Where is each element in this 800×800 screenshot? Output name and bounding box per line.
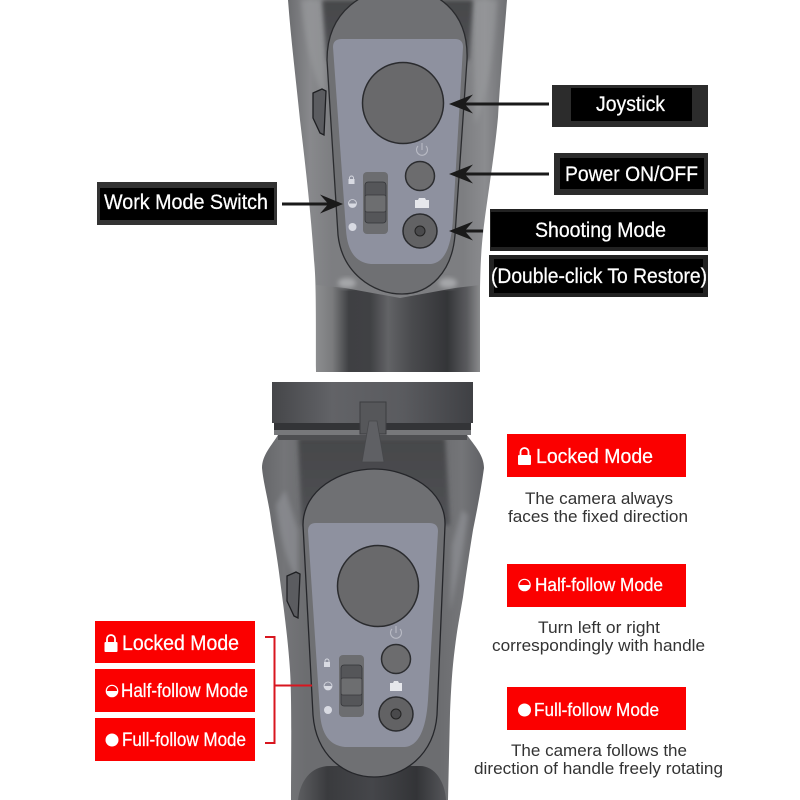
arrow: power	[449, 164, 549, 184]
camera icon, top	[415, 198, 429, 208]
description: full-follow mode: direction of handle freely rotating	[474, 760, 723, 778]
mode switch, top	[363, 172, 388, 234]
arrow: shooting mode	[449, 222, 483, 240]
right label: full-follow mode	[507, 687, 686, 730]
gimbal handle photo, top	[288, 0, 507, 372]
joystick, bottom	[338, 546, 418, 626]
tilt lever	[360, 402, 386, 462]
red bracket connector	[265, 637, 312, 743]
mode switch, bottom	[339, 655, 364, 717]
mode indicator icons, bottom	[324, 659, 332, 714]
shooting button, bottom	[379, 697, 413, 731]
panel: work modes	[95, 382, 723, 800]
description: locked mode	[508, 490, 688, 526]
description: half-follow mode: correspondingly with handle	[492, 637, 705, 655]
left label: full-follow mode: Full-follow Mode	[122, 730, 246, 751]
left label: locked mode	[95, 621, 255, 663]
description: locked mode: The camera always	[525, 490, 673, 508]
right label: full-follow mode: Full-follow Mode	[534, 700, 659, 720]
side button, bottom	[287, 572, 300, 618]
right label: half-follow mode	[507, 564, 686, 607]
label: power on/off: Power ON/OFF	[565, 163, 698, 186]
gimbal photo, bottom	[262, 382, 484, 800]
power button, top	[406, 162, 434, 190]
right label: locked mode: Locked Mode	[536, 446, 653, 468]
left label: half-follow mode	[95, 669, 255, 712]
description: half-follow mode: Turn left or right	[538, 619, 660, 637]
right label: half-follow mode: Half-follow Mode	[535, 575, 663, 595]
left label: full-follow mode	[95, 718, 255, 761]
label: joystick	[552, 85, 708, 127]
joystick, top	[362, 62, 444, 144]
arrow: work mode switch	[282, 194, 343, 214]
arrow: joystick	[449, 94, 549, 114]
description: full-follow mode: The camera follows the	[511, 742, 687, 760]
label: double-click to restore: (Double-click To Restore)	[491, 265, 707, 288]
label: power on/off	[554, 153, 708, 195]
power icon, top	[416, 143, 427, 155]
left label: half-follow mode: Half-follow Mode	[121, 681, 248, 702]
label: shooting mode: Shooting Mode	[535, 219, 666, 242]
description: half-follow mode	[492, 619, 705, 655]
label: work mode switch	[97, 182, 277, 225]
mode indicator icons, top	[348, 176, 356, 231]
label: joystick: Joystick	[596, 93, 665, 116]
left label: locked mode: Locked Mode	[122, 632, 239, 655]
description: full-follow mode	[474, 742, 723, 778]
panel: gimbal controls overview	[97, 0, 708, 372]
side button, top	[313, 89, 326, 135]
label: shooting mode	[490, 209, 708, 251]
description: locked mode: faces the fixed direction	[508, 508, 688, 526]
right label: locked mode	[507, 434, 686, 477]
label: work mode switch: Work Mode Switch	[104, 191, 268, 214]
power icon, bottom	[390, 626, 402, 638]
shooting button, top	[403, 214, 437, 248]
label: double-click to restore	[489, 255, 708, 297]
power button, bottom	[382, 644, 410, 674]
camera icon, bottom	[390, 681, 402, 691]
